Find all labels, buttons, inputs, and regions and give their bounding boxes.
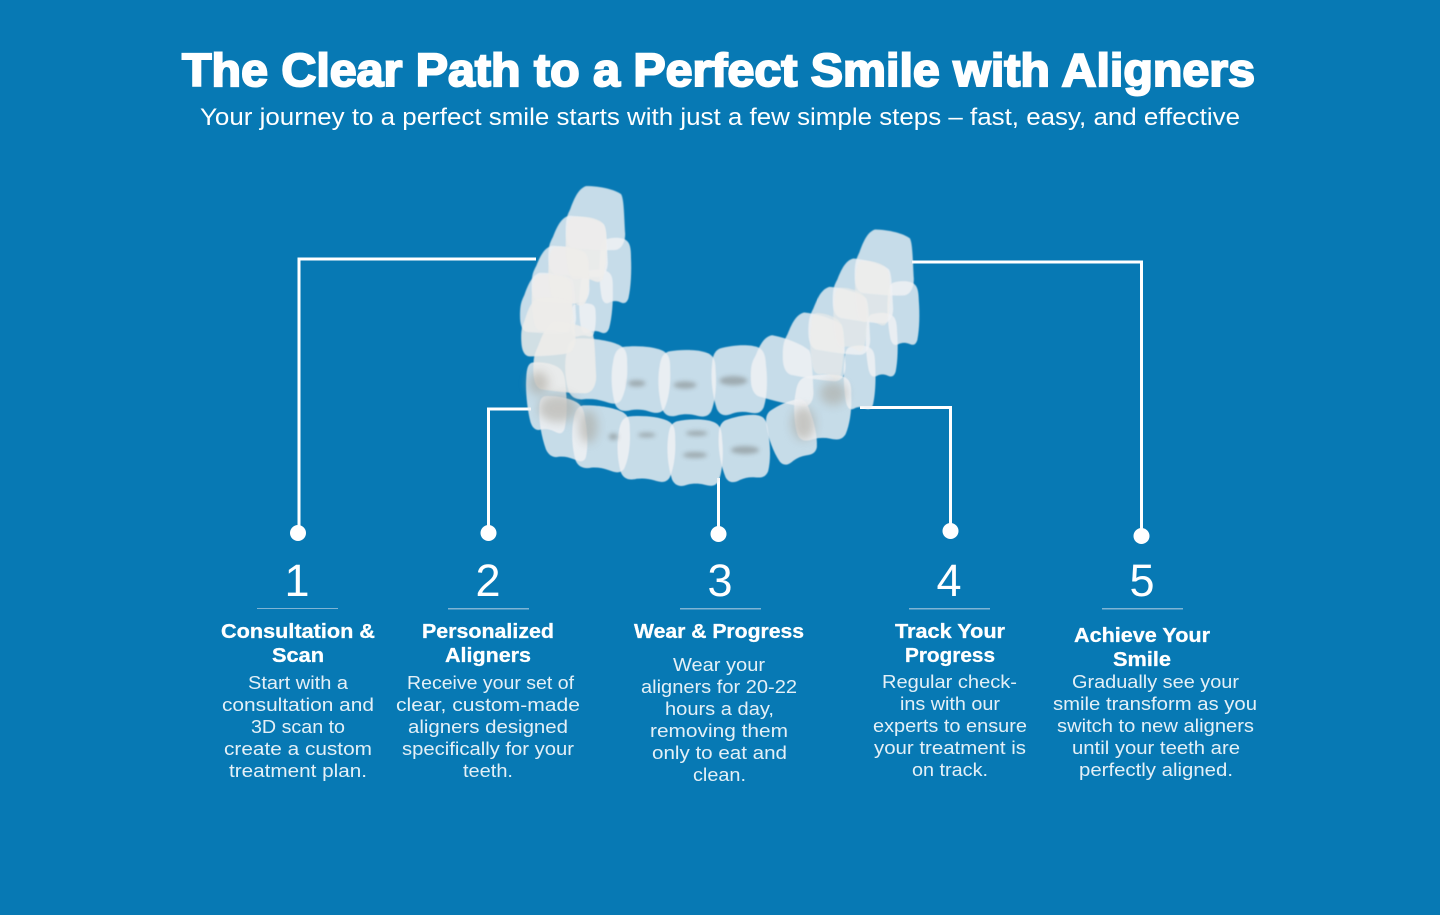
- body 2: teeth.: [463, 760, 513, 781]
- body 3: only to eat and: [652, 742, 787, 763]
- subtitle: Your journey to a perfect smile starts with just a few simple steps – fast, easy, and effective: [200, 104, 1240, 131]
- right arm white overlays: [810, 258, 890, 382]
- heading 2: Aligners: [445, 645, 531, 667]
- heading 1: [221, 621, 375, 667]
- body 4: ins with our: [900, 693, 1000, 714]
- heading 2: Personalized: [422, 621, 554, 643]
- body 3: hours a day,: [665, 698, 774, 719]
- heading 2: [422, 621, 554, 667]
- body 3: removing them: [650, 720, 788, 741]
- body 2: aligners designed: [408, 716, 568, 737]
- body 2: Receive your set of: [407, 672, 575, 693]
- heading 1: Consultation &: [221, 621, 375, 643]
- heading 3: Wear & Progress: [634, 621, 804, 643]
- number 4: 4: [936, 555, 962, 606]
- heading 4: Track Your: [895, 621, 1005, 643]
- body 4: experts to ensure: [873, 715, 1027, 736]
- step 1: [221, 555, 375, 781]
- connector: step 3: [710, 478, 726, 542]
- body 5: [1053, 671, 1257, 780]
- body 2: clear, custom-made: [396, 694, 580, 715]
- title: The Clear Path to a Perfect Smile with Aligners: [182, 44, 1255, 96]
- body 3: clean.: [693, 764, 746, 785]
- body 5: Gradually see your: [1072, 671, 1239, 692]
- heading 5: Smile: [1113, 649, 1171, 671]
- body 3: Wear your: [673, 654, 765, 675]
- step 3: [634, 555, 804, 785]
- body 5: switch to new aligners: [1057, 715, 1254, 736]
- body 1: consultation and: [222, 694, 374, 715]
- step 2: [396, 555, 580, 781]
- body 5: smile transform as you: [1053, 693, 1257, 714]
- step 4: [873, 555, 1027, 780]
- heading 1: Scan: [272, 645, 324, 667]
- body 5: perfectly aligned.: [1079, 759, 1233, 780]
- rule 2: [448, 608, 529, 610]
- heading 4: [895, 621, 1005, 667]
- rule 5: [1102, 608, 1183, 610]
- number 2: 2: [475, 555, 501, 606]
- step 5: [1053, 555, 1257, 780]
- number 5: 5: [1129, 555, 1155, 606]
- rule 3: [680, 608, 761, 610]
- body 1: [222, 672, 374, 781]
- body 5: until your teeth are: [1072, 737, 1240, 758]
- connector: step 4: [860, 408, 958, 539]
- body 2: specifically for your: [402, 738, 574, 759]
- illustration: clear aligner trays: [519, 184, 920, 486]
- number 1: 1: [284, 555, 310, 606]
- body 4: [873, 671, 1027, 780]
- body 3: aligners for 20-22: [641, 676, 797, 697]
- heading 4: Progress: [905, 645, 995, 667]
- body 4: your treatment is: [874, 737, 1026, 758]
- upper tray front teeth: [564, 227, 914, 417]
- body 1: 3D scan to: [251, 716, 345, 737]
- body 4: on track.: [912, 759, 988, 780]
- number 3: 3: [707, 555, 733, 606]
- body 1: Start with a: [248, 672, 349, 693]
- body 1: create a custom: [224, 738, 372, 759]
- body 3: [641, 654, 797, 785]
- connector: step 1: [290, 259, 536, 541]
- rule 4: [909, 608, 990, 610]
- heading 5: Achieve Your: [1074, 625, 1210, 647]
- grey tint on lower left: [528, 372, 847, 443]
- connector: step 2: [480, 409, 531, 541]
- heading 5: [1074, 625, 1210, 671]
- body 2: [396, 672, 580, 781]
- rule 1: [257, 608, 338, 609]
- lower tray: [525, 359, 852, 486]
- body 1: treatment plan.: [229, 760, 367, 781]
- upper tray rear row: [571, 238, 920, 409]
- connector: step 5: [912, 262, 1150, 544]
- left arm white overlays: [519, 214, 607, 397]
- aligner shadows: [609, 376, 759, 458]
- upper tray left arm: [520, 184, 625, 335]
- body 4: Regular check-: [882, 671, 1017, 692]
